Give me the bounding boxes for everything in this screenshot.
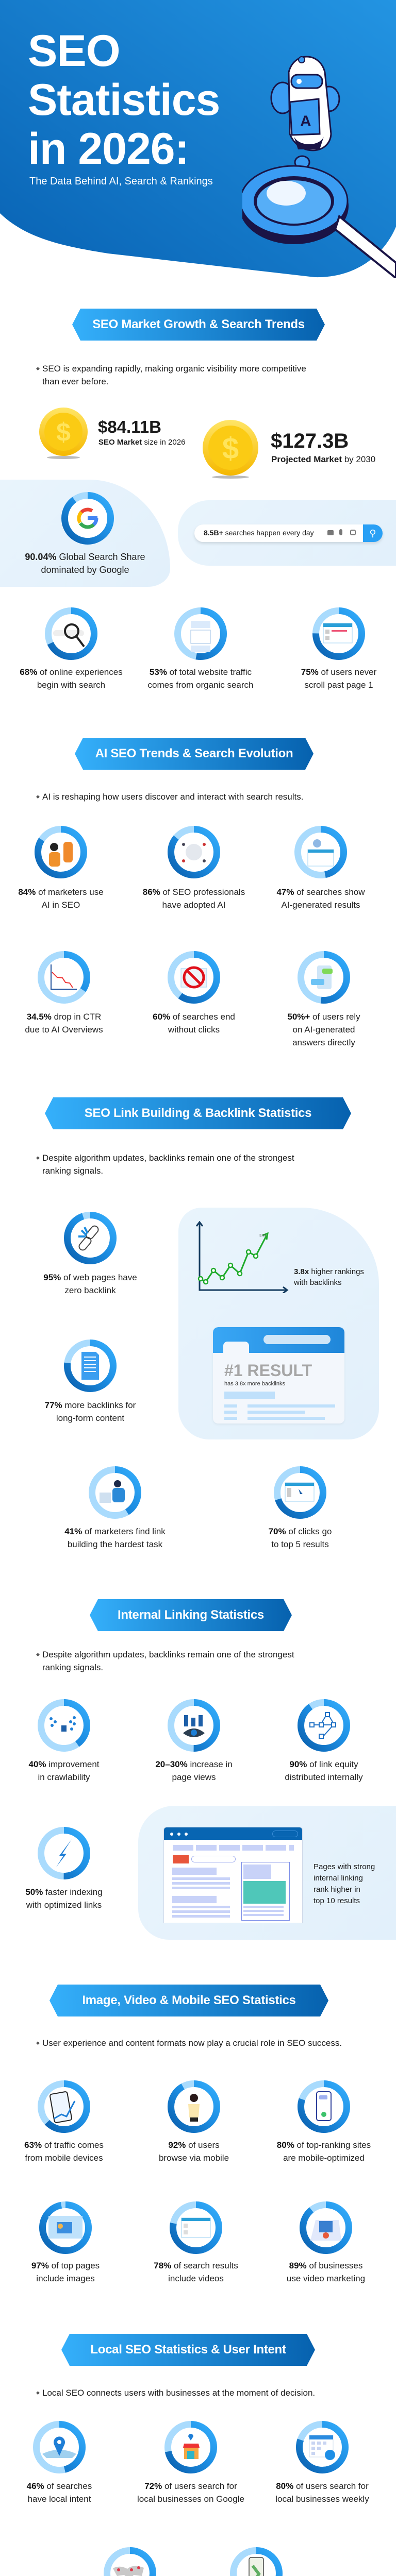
illustration: robot with magnifier: A	[300, 113, 311, 130]
title: SEO	[28, 26, 120, 76]
icon: gold coin large	[203, 420, 258, 479]
donut: 30%	[228, 2545, 285, 2576]
text: 60%	[153, 1012, 235, 1035]
text: 75%	[301, 667, 376, 690]
donut: 20-30%	[168, 1699, 220, 1752]
text: 80%	[257, 2139, 391, 2164]
icon: gold coin large: $	[222, 432, 239, 465]
panel: google share	[0, 480, 170, 587]
text: 53%: 53% of total website traffic	[150, 667, 252, 677]
section 4 intro: ranking signals.	[42, 1663, 103, 1672]
donut: 78%	[168, 2199, 224, 2256]
section 2 intro: AI is reshaping how users discover and interact with search results.	[42, 792, 303, 802]
text: 84%	[18, 887, 104, 910]
text: 78%: 78% of search results	[154, 2261, 238, 2270]
section 3 intro: ranking signals.	[42, 1166, 103, 1176]
donut: 40%	[38, 1699, 90, 1752]
text: 50%+: 50%+ of users rely	[287, 1012, 360, 1022]
donut: 95%	[64, 1212, 117, 1264]
text: 80% weekly	[255, 2480, 389, 2505]
section 3 banner: SEO Link Building & Backlink Statistics	[85, 1106, 311, 1120]
text: 46%	[0, 2480, 126, 2505]
text: 53%: comes from organic search	[147, 680, 254, 690]
section 4 banner: Internal Linking Statistics	[118, 1608, 264, 1622]
text: pages with strong internal linking: rank higher in	[314, 1885, 360, 1894]
browser card: #1 result: has 3.8x more backlinks	[224, 1381, 285, 1387]
text: 72%: 72% of users search for	[144, 2481, 237, 2491]
section 1 intro: than ever before.	[42, 377, 109, 386]
panel: google share: 90.04% Global Search Share	[25, 552, 145, 562]
text: 86%: have adopted AI	[162, 900, 225, 910]
text: 77%: 77% more backlinks for	[45, 1400, 136, 1410]
donut: 92%	[166, 2078, 222, 2135]
donut: 34.5%	[38, 951, 90, 1004]
text: 95%	[43, 1273, 137, 1295]
google donut	[61, 492, 114, 545]
section 2 banner: AI SEO Trends & Search Evolution	[95, 747, 293, 760]
text: 46%: 46% of searches	[27, 2481, 92, 2491]
text: 50%+: on AI-generated	[293, 1025, 355, 1035]
section 4 intro	[36, 1648, 294, 1674]
text: pages with strong internal linking	[314, 1861, 375, 1907]
text: 63%: 63% of traffic comes	[24, 2140, 104, 2150]
text: 90%: distributed internally	[285, 1772, 363, 1782]
text: 97%: include images	[36, 2274, 95, 2283]
donut: 97%	[37, 2199, 94, 2256]
section 6 banner	[61, 2334, 315, 2366]
donut: 75% page 1	[312, 607, 365, 660]
text: 86%: 86% of SEO professionals	[143, 887, 245, 897]
text: 47%: 47% of searches show	[276, 887, 365, 897]
text: 20-30%	[155, 1759, 233, 1782]
text: 97%: 97% of top pages	[31, 2261, 100, 2270]
section 4 intro: Despite algorithm updates, backlinks remain one of the strongest	[42, 1650, 294, 1659]
stat: projected market: Projected Market by 2030	[271, 454, 375, 464]
section 2 banner	[75, 738, 314, 770]
text: 68%: begin with search	[37, 680, 105, 690]
section 5 banner	[50, 1985, 328, 2016]
illustration: robot with magnifier	[242, 56, 396, 278]
text: 70%: to top 5 results	[271, 1539, 329, 1549]
line chart: 3.8x	[259, 1234, 267, 1238]
text: 84%: AI in SEO	[42, 900, 80, 910]
search bar: 8.5B+ searches happen every day	[204, 529, 314, 537]
text: 86%	[143, 887, 245, 910]
text: 46%: have local intent	[28, 2494, 91, 2504]
section 3 intro: Despite algorithm updates, backlinks remain one of the strongest	[42, 1153, 294, 1163]
stat: SEO market size: SEO Market size in 2026	[98, 438, 185, 447]
text: 34.5%: due to AI Overviews	[25, 1025, 103, 1035]
panel: daily searches	[178, 500, 396, 566]
section 1 banner: SEO Market Growth & Search Trends	[92, 317, 305, 331]
donut: 42%	[102, 2545, 158, 2576]
donut: 80% weekly	[294, 2419, 351, 2476]
text: 40%: in crawlability	[38, 1772, 90, 1782]
section 5 banner: Image, Video & Mobile SEO Statistics	[82, 1993, 296, 2007]
text: 78%: include videos	[168, 2274, 224, 2283]
donut: 53% traffic	[174, 607, 227, 660]
text: 95%: zero backlink	[64, 1285, 116, 1295]
donut: 60%	[168, 951, 220, 1004]
section 3 intro	[36, 1151, 294, 1177]
panel: google share: dominated by Google	[41, 565, 129, 575]
text: 53%	[147, 667, 254, 690]
text: 20-30%: page views	[172, 1772, 216, 1782]
text: 72%	[124, 2480, 258, 2505]
text: 78%	[129, 2259, 263, 2285]
text: 63%	[0, 2139, 131, 2164]
text: 92%	[127, 2139, 261, 2164]
text: 40%: 40% improvement	[28, 1759, 99, 1769]
header background	[0, 0, 396, 277]
text: 89%: use video marketing	[287, 2274, 365, 2283]
text: 40%	[28, 1759, 99, 1782]
text: 60%: without clicks	[168, 1025, 220, 1035]
stat: SEO market size: $84.11B	[98, 417, 161, 436]
title	[28, 26, 220, 174]
text: 70%: 70% of clicks go	[269, 1527, 332, 1536]
text: 72%: local businesses on Google	[137, 2494, 244, 2504]
text: 20-30%: 20–30% increase in	[155, 1759, 233, 1769]
search bar: ⚲	[369, 528, 376, 538]
text: pages with strong internal linking: Pages with strong	[314, 1862, 375, 1871]
section 5 intro: User experience and content formats now play a crucial role in SEO success.	[42, 2038, 342, 2048]
donut: 41%	[89, 1466, 141, 1519]
stat: projected market	[203, 420, 375, 479]
text: 3.8x higher rankings: 3.8x higher rankings	[294, 1267, 364, 1276]
donut: 86%	[168, 826, 220, 878]
donut: 50%+	[298, 951, 350, 1004]
stat: SEO market size	[39, 408, 185, 459]
text: 41%: 41% of marketers find link	[64, 1527, 166, 1536]
text: 34.5%	[25, 1012, 103, 1035]
text: 95%: 95% of web pages have	[43, 1273, 137, 1282]
title: in 2026:	[28, 124, 189, 174]
donut: 50% faster indexing	[36, 1825, 92, 1882]
browser card: #1 result	[213, 1327, 344, 1423]
line chart	[196, 1221, 289, 1293]
text: 89%	[259, 2259, 393, 2285]
text: 63%: from mobile devices	[25, 2153, 103, 2163]
text: 75%: 75% of users never	[301, 667, 376, 677]
text: pages with strong internal linking: top 10 results	[314, 1896, 360, 1905]
stat: projected market: $127.3B	[271, 430, 349, 452]
text: 50%+	[287, 1012, 360, 1047]
text: 70%	[269, 1527, 332, 1549]
text: 80% weekly: local businesses weekly	[275, 2494, 369, 2504]
text: 75%: scroll past page 1	[304, 680, 373, 690]
text: 68%	[20, 667, 123, 690]
browser mockup	[163, 1827, 303, 1923]
text: 89%: 89% of businesses	[289, 2261, 362, 2270]
section 3 banner	[45, 1097, 351, 1129]
text: 97%	[0, 2259, 133, 2285]
text: 92%: 92% of users	[168, 2140, 220, 2150]
text: 90%: 90% of link equity	[289, 1759, 358, 1769]
text: 77%: long-form content	[56, 1413, 124, 1423]
text: 3.8x higher rankings: with backlinks	[294, 1278, 342, 1287]
browser card: #1 result: #1 RESULT	[224, 1361, 312, 1380]
donut: 72%	[162, 2419, 219, 2476]
text: 3.8x higher rankings	[294, 1267, 364, 1287]
text: 60%: 60% of searches end	[153, 1012, 235, 1022]
donut: 70%	[274, 1466, 326, 1519]
section 1 intro: SEO is expanding rapidly, making organic visibility more competitive	[42, 364, 306, 374]
text: 50%+: answers directly	[292, 1038, 355, 1047]
text: 84%: 84% of marketers use	[18, 887, 104, 897]
text: 50% faster	[0, 1886, 131, 1911]
text: 90%	[257, 1758, 391, 1784]
title: Statistics	[28, 75, 220, 125]
text: 47%: AI-generated results	[281, 900, 360, 910]
text: 50% faster: 50% faster indexing	[25, 1887, 103, 1897]
text: 68%: 68% of online experiences	[20, 667, 123, 677]
donut: 63%	[36, 2078, 92, 2135]
section 1 banner	[72, 309, 325, 341]
text: 80%: 80% of top-ranking sites	[277, 2140, 371, 2150]
text: 50% faster: with optimized links	[26, 1900, 102, 1910]
text: pages with strong internal linking: internal linking	[314, 1874, 363, 1883]
text: 80% weekly: 80% of users search for	[276, 2481, 369, 2491]
text: 77%	[45, 1400, 136, 1423]
icon: gold coin: $	[56, 418, 71, 447]
search bar	[194, 524, 383, 542]
panel: internal linking	[138, 1806, 396, 1940]
donut: 77%	[64, 1340, 117, 1392]
donut: 47%	[294, 826, 347, 878]
donut: 46%	[31, 2419, 88, 2476]
donut: 90%	[295, 1697, 352, 1754]
section 1 intro	[36, 362, 306, 388]
text: 41%: building the hardest task	[68, 1539, 162, 1549]
text: 80%: are mobile-optimized	[283, 2153, 365, 2163]
text: 92%: browse via mobile	[159, 2153, 229, 2163]
text: 41%	[64, 1527, 166, 1549]
text: 47%	[276, 887, 365, 910]
donut: 89%	[298, 2199, 354, 2256]
section 4 banner	[90, 1599, 292, 1631]
donut: 84%	[35, 826, 87, 878]
panel: backlinks chart & #1 result	[178, 1208, 379, 1439]
text: 34.5%: 34.5% drop in CTR	[27, 1012, 101, 1022]
subtitle: The Data Behind AI, Search & Rankings	[29, 176, 213, 187]
section 6 banner: Local SEO Statistics & User Intent	[90, 2343, 286, 2357]
icon: gold coin	[39, 408, 88, 459]
section 6 intro: Local SEO connects users with businesses at the moment of decision.	[42, 2388, 315, 2398]
donut: 68% search	[45, 607, 97, 660]
donut: 80%	[295, 2078, 352, 2135]
